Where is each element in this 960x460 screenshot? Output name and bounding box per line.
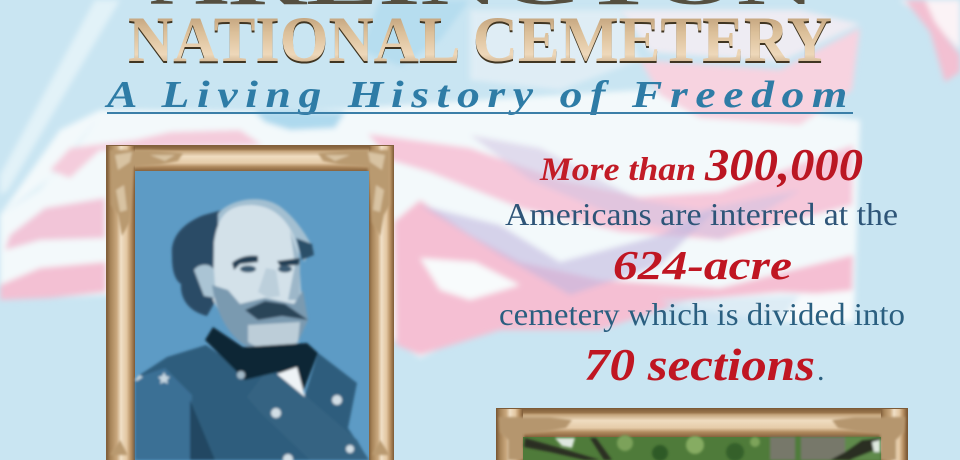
text: period: . <box>817 354 824 387</box>
stat: more than: More than <box>539 152 696 188</box>
collar <box>205 327 318 392</box>
stat: 70 sections: 70 sections <box>584 340 815 390</box>
coat <box>135 345 369 460</box>
statistics text block <box>499 139 905 390</box>
cemetery photo frame <box>496 408 908 460</box>
text: Americans are interred at the: Americans are interred at the <box>505 196 898 232</box>
hair <box>172 199 314 316</box>
stat: 624-acre: 624-acre <box>613 242 792 288</box>
title: National Cemetery: NATIONAL CEMETERY <box>128 6 832 78</box>
title: National Cemetery: NATIONAL CEMETERY <box>128 4 832 76</box>
text: cemetery which is divided into: cemetery which is divided into <box>499 296 905 332</box>
buttons <box>237 371 354 460</box>
insignia stars <box>135 372 170 384</box>
shirt <box>277 367 305 397</box>
photo: general portrait <box>135 171 369 460</box>
subtitle: A Living History of Freedom <box>104 74 847 116</box>
stat: 300,000: 300,000 <box>704 139 863 190</box>
photo: trees <box>523 435 881 460</box>
portrait frame <box>106 145 394 460</box>
frame: landscape gold border <box>496 408 908 460</box>
beard <box>212 285 308 351</box>
face <box>194 205 301 322</box>
frame: portrait gold border <box>106 145 394 460</box>
